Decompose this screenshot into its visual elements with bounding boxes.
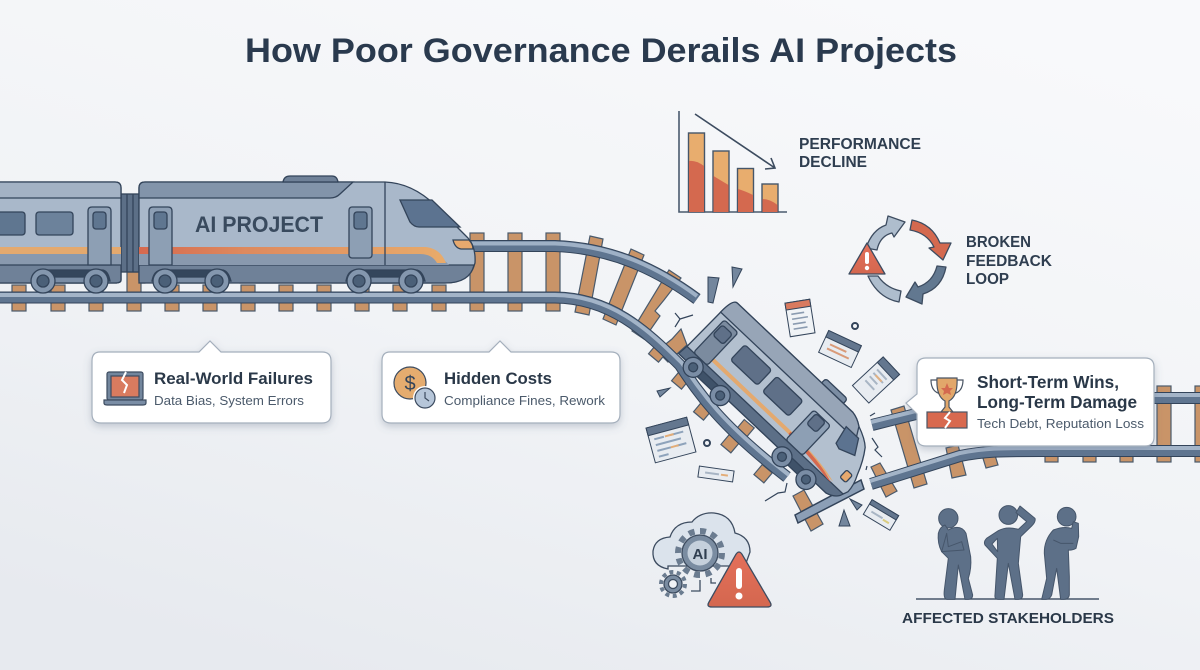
details: Compliance Fines, Rework (444, 393, 606, 408)
derailed train carriage (669, 293, 894, 514)
document strip (698, 466, 734, 482)
details: Tech Debt, Reputation Loss (977, 416, 1145, 431)
broken rail under crash (793, 480, 864, 531)
label: broken feedback loop: LOOP (966, 271, 1009, 288)
callout: real-world failures (92, 341, 331, 423)
label: broken feedback loop: FEEDBACK (966, 253, 1053, 270)
cracks (675, 313, 882, 501)
trend arrow (695, 114, 775, 169)
document card (863, 500, 899, 530)
heading: Long-Term Damage (977, 392, 1137, 412)
title: How Poor Governance Derails AI Projects (245, 32, 957, 70)
details: Data Bias, System Errors (154, 393, 305, 408)
bar chart: performance decline (679, 111, 787, 212)
document with red header (785, 299, 815, 337)
callout: hidden costs (382, 341, 620, 423)
person 3 (1042, 507, 1079, 599)
icon: AI cloud with warning (653, 513, 771, 607)
heading: Short-Term Wins, (977, 372, 1119, 392)
small rings (704, 323, 858, 446)
heading: Real-World Failures (154, 369, 313, 388)
label: AI PROJECT: AI PROJECT (195, 212, 324, 237)
gear with AI: AI (692, 546, 708, 563)
warning triangle (708, 552, 771, 607)
icon: broken laptop (104, 372, 146, 405)
lead carriage (139, 176, 475, 283)
icon: coin and clock (394, 367, 437, 410)
label: affected stakeholders: AFFECTED STAKEHOLDERS (902, 610, 1114, 627)
small gear (661, 572, 685, 596)
person 1 (938, 509, 973, 599)
callout: short-term wins (906, 358, 1154, 446)
train: AI project (0, 176, 475, 293)
heading: Hidden Costs (444, 369, 552, 388)
right railway track (870, 386, 1200, 497)
crash debris (646, 267, 900, 530)
affected stakeholders figures (916, 506, 1099, 599)
icon: cracked trophy (927, 378, 967, 428)
person 2 (984, 506, 1035, 599)
car connector (121, 194, 139, 272)
label: performance decline: DECLINE (799, 154, 867, 171)
rear carriage (0, 182, 121, 283)
metal shards (657, 267, 862, 526)
document panel (646, 417, 696, 463)
document chart (819, 331, 861, 367)
label: performance decline: PERFORMANCE (799, 136, 921, 153)
document code (852, 357, 900, 403)
label: broken feedback loop: BROKEN (966, 234, 1031, 251)
left railway track (0, 233, 789, 483)
icon: coin and clock: $ (404, 373, 416, 395)
bogies and wheels (31, 269, 425, 293)
icon: broken feedback loop (849, 216, 951, 304)
